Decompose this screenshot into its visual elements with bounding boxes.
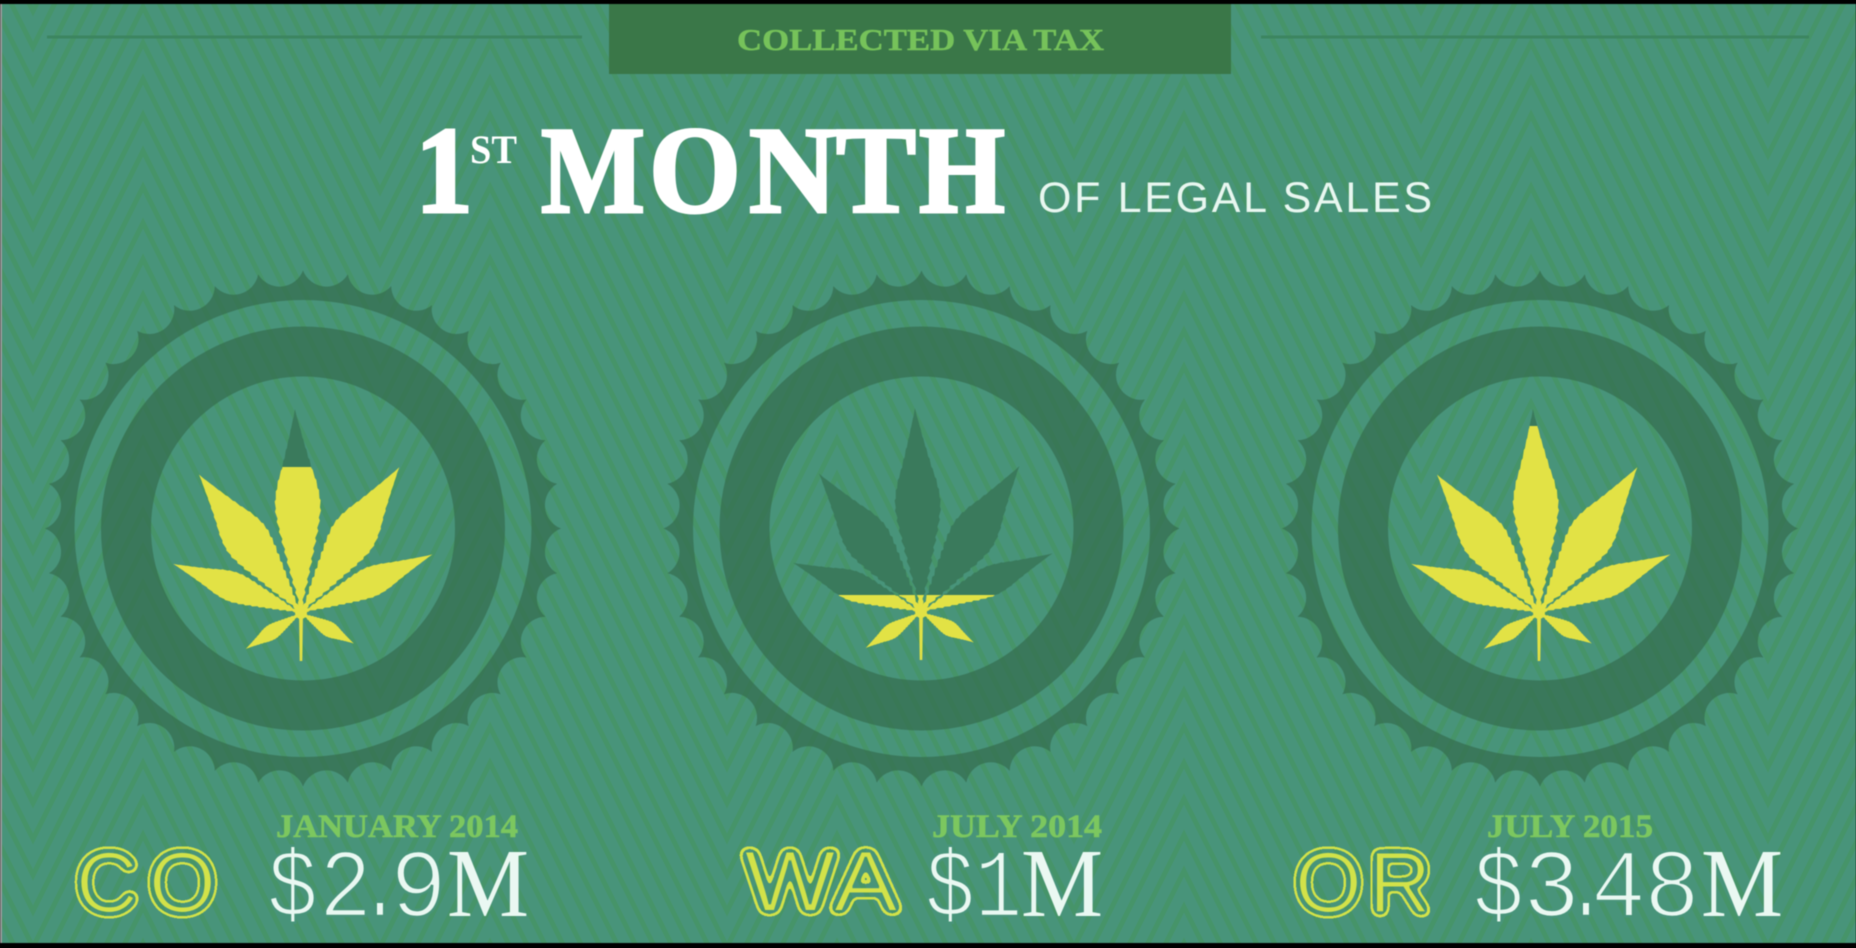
title: 1st month of legal sales (415, 102, 1432, 239)
amount: Oregon: 3 (1523, 836, 1580, 946)
date: January 2014: JANUARY 2014 (276, 809, 518, 845)
title: 1st month of legal sales: 1 (415, 102, 473, 239)
amount: Colorado: 9 (390, 836, 447, 946)
amount: Oregon: . (1566, 836, 1606, 946)
state label: OR: OR (1295, 835, 1431, 931)
banner: collected via tax: COLLECTED VIA TAX (737, 22, 1105, 57)
amount: Colorado: $ (267, 836, 318, 946)
title: 1st month of legal sales: O (649, 102, 741, 239)
icon: Washington leaf filled to tax level (788, 407, 1059, 660)
amount: Colorado: . (360, 836, 400, 946)
title: 1st month of legal sales: OF LEGAL SALES (1038, 174, 1432, 222)
title: 1st month of legal sales: T (836, 102, 916, 239)
amount: Washington: M (1021, 830, 1103, 937)
amount: Colorado: M (447, 830, 529, 937)
state label: CO: CO (76, 835, 216, 931)
panel: Oregon (1282, 270, 1798, 946)
icon: Colorado leaf filled to tax level (168, 408, 439, 661)
seal: Washington rosette (664, 270, 1180, 786)
date: July 2014: JULY 2014 (932, 809, 1102, 845)
amount: Washington: $ (925, 836, 975, 946)
panel: Colorado (45, 270, 561, 946)
icon: Oregon leaf filled to tax level (1406, 408, 1677, 661)
amount: Oregon: M (1701, 830, 1783, 937)
title: 1st month of legal sales: ST (470, 127, 517, 172)
title: 1st month of legal sales: N (749, 102, 837, 239)
panel: Washington (664, 270, 1180, 946)
amount: Colorado: 2 (319, 836, 372, 946)
date: July 2015: JULY 2015 (1487, 809, 1653, 845)
amount: Oregon: $ (1473, 836, 1524, 946)
amount: Oregon: 8 (1644, 836, 1700, 946)
banner: collected via tax (47, 4, 1809, 74)
title: 1st month of legal sales: H (919, 102, 1005, 239)
seal: Oregon rosette (1282, 270, 1798, 786)
amount: Oregon: 4 (1591, 836, 1646, 946)
state label: WA: WA (744, 834, 899, 930)
title: 1st month of legal sales: M (541, 102, 645, 239)
seal: Colorado rosette (45, 270, 561, 786)
amount: Washington: 1 (975, 836, 1022, 946)
